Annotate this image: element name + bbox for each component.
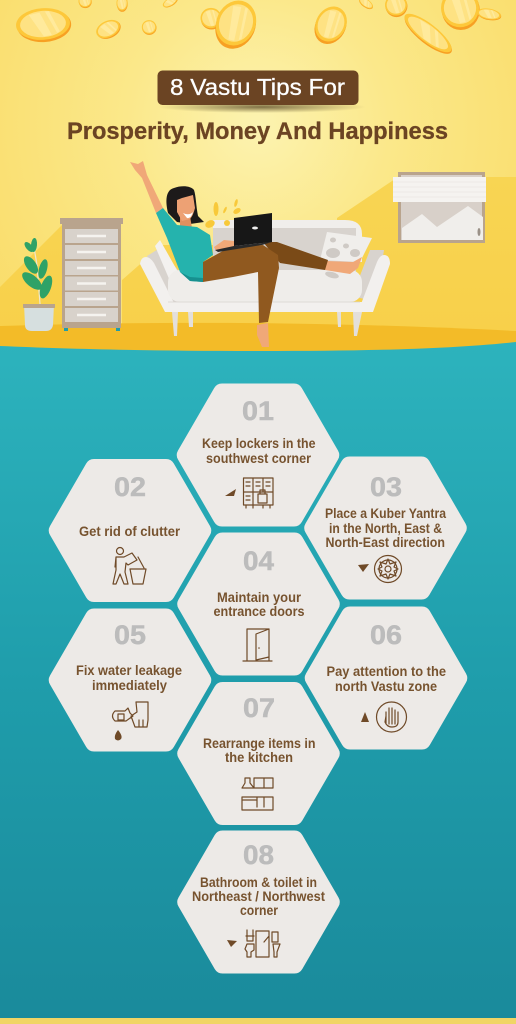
hexagon 02 [58,468,202,593]
floor [0,323,516,360]
hexagon 03: Place a Kuber Yantra [325,506,446,521]
bottom yellow strip [0,1018,516,1024]
icon: hand in circle [361,702,406,732]
icon: yantra [358,556,402,582]
icon: locker [225,478,273,508]
hexagon 08: Northeast / Northwest [192,889,325,904]
hexagon 08: corner [240,903,279,918]
illustration: woman with laptop [130,161,362,347]
illustration: plant [19,238,55,331]
falling coins [15,0,502,60]
title line 2: Prosperity, Money And Happiness [67,118,448,145]
icon: door [243,629,272,661]
hexagon 06: north Vastu zone [335,679,437,694]
hexagon 05: 05 [114,620,146,650]
icon: person with bin [113,548,146,584]
title badge: 8 Vastu Tips For [170,74,345,100]
hexagon 03: 03 [370,472,402,502]
hexagon 02: 02 [114,472,146,502]
hexagon 03 [313,466,458,590]
shirt [156,208,213,282]
teal lower panel [0,342,516,1024]
hexagon 07: Rearrange items in [203,736,316,751]
hexagon 02: Get rid of clutter [79,524,181,539]
hexagon 06: Pay attention to the [326,664,446,679]
hexagon 03: North-East direction [326,535,445,550]
background: yellow wall [0,0,516,360]
forearm [214,240,234,251]
hexagon 01 [186,392,330,518]
illustration: drawers [60,218,123,331]
neck [180,214,192,228]
wall shaded zones [0,177,516,335]
hexagon 06: 06 [370,620,402,650]
hexagon 06 [314,616,458,740]
hexagon 05 [58,618,202,742]
far leg and foot [325,257,362,274]
hexagon 04 [186,542,331,666]
hexagon 01: southwest corner [206,451,312,466]
hair [166,186,204,224]
title badge [158,70,366,113]
icon: kitchen [242,778,273,810]
hexagon 04: Maintain your [217,590,302,605]
illustration: sofa [140,220,390,336]
hexagon 04: 04 [243,546,274,576]
hexagon 01: 01 [242,396,274,426]
hexagon 07: 07 [243,693,275,723]
hexagon 07 [186,691,331,816]
illustration: window with blind [393,172,486,243]
hexagon 04: entrance doors [214,604,304,619]
hexagon 08 [186,840,331,964]
hexagon 01: Keep lockers in the [202,436,316,451]
hexagon 07: the kitchen [225,750,293,765]
arm raised [130,161,163,213]
hexagon 05: Fix water leakage [76,663,182,678]
hexagon 08: 08 [243,840,274,870]
hexagon 03: in the North, East & [329,521,442,536]
hexagon 08: Bathroom & toilet in [200,875,317,890]
face [177,195,195,221]
icon: leaking tap [112,702,148,740]
near leg [257,323,269,347]
laptop [234,213,272,246]
icon: bathroom [227,930,280,957]
laptop coins [214,202,218,216]
hexagon 05: immediately [92,678,167,693]
